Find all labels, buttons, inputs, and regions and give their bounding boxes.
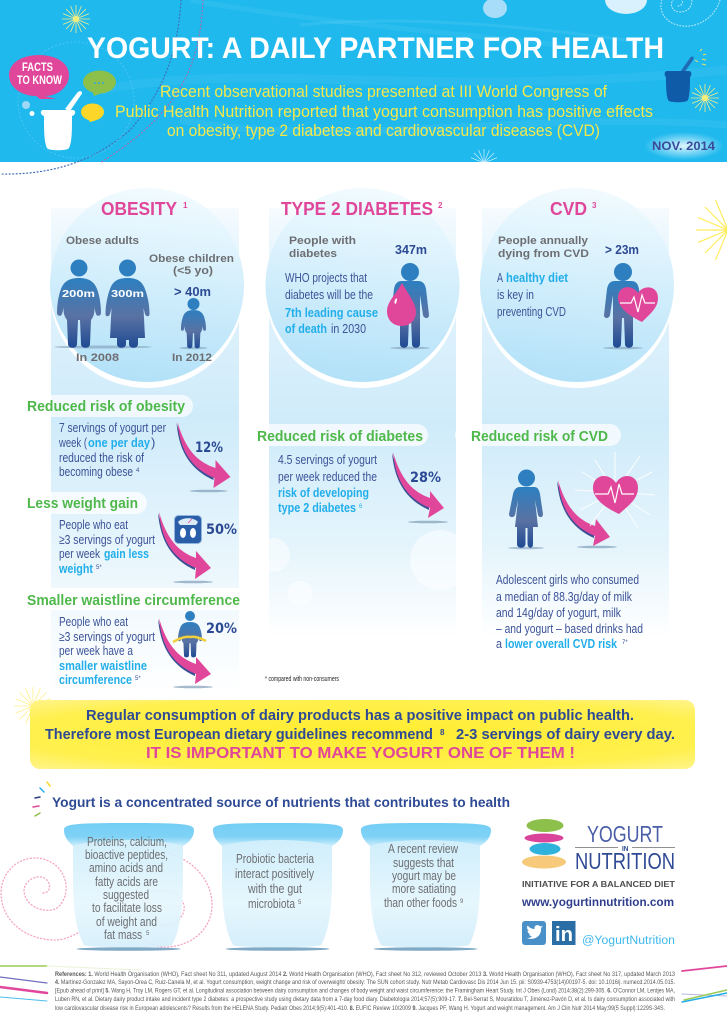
yogurt cup: satiating: suggests that (393, 855, 454, 870)
text: reduced risk of obesity: one per day (88, 435, 151, 450)
text: smaller waistline: smaller waistline (59, 658, 147, 673)
text: less weight gain: gain less (104, 546, 149, 561)
stat: 20 percent: 20% (206, 621, 237, 637)
icon: bathroom scale (174, 516, 202, 544)
date badge: NOV. 2014 (652, 139, 715, 153)
section: reduced risk of cvd: Reduced risk of CVD (471, 429, 608, 445)
text: reduced risk of obesity: becoming obese (59, 464, 133, 479)
obesity heading: 1 (183, 201, 188, 210)
text: reduced risk of diabetes (278, 452, 377, 515)
section: less weight gain: Less weight gain (27, 496, 138, 512)
people with diabetes label: diabetes (289, 248, 337, 260)
yogurt cup: loss of weight: 5 (146, 931, 150, 937)
references: low cardiovascular disease risk in European adolescents? Results from the HELENA Study. Pediatr Obes 2014;9(5):401-410. 8. EUFIC Review 10/2009 9. Jacques PF, Wang H. Yogurt and weight management. Am J Clin Nutr 2014 May;99(5 Suppl):1229S-34S. (55, 1005, 665, 1012)
in 2012 label: In 2012 (172, 352, 212, 364)
callout: dairy recommendation: 2-3 servings of dairy every day. (456, 727, 675, 743)
yogurt cup: satiating: 9 (460, 899, 464, 905)
icon: obese woman 300m: 300m (111, 288, 144, 300)
sparkle: header right (691, 84, 719, 112)
title: YOGURT: A DAILY PARTNER FOR HEALTH (87, 32, 664, 65)
text: reduced risk of diabetes: per week reduced the (278, 469, 377, 484)
header banner (0, 0, 727, 162)
text: healthy diet: is key in (497, 287, 534, 302)
icon: adolescent girl (508, 470, 544, 549)
text: adolescent girls: Adolescent girls who consumed (496, 572, 639, 587)
confetti (33, 782, 50, 816)
icon: obese man 200m: 200m (62, 288, 95, 300)
obesity background (50, 188, 244, 695)
sparkle: top left (62, 5, 90, 33)
yogurt cup: probiotic bacteria: with the gut (247, 881, 302, 896)
cvd heading: CVD (550, 199, 587, 219)
text: WHO projection: 7th leading cause (285, 305, 378, 320)
obesity heading: OBESITY (101, 199, 177, 219)
dotted pink spirals (1, 852, 212, 947)
icon: linkedin (552, 921, 576, 946)
cvd background (480, 188, 674, 638)
text: reduced risk of diabetes: risk of developing (278, 485, 369, 500)
yogurt cup: probiotic bacteria: Probiotic bacteria (236, 851, 315, 866)
callout: dairy recommendation: 8 (440, 728, 445, 737)
text: WHO projection: of death (285, 321, 327, 336)
diabetes background (266, 188, 460, 610)
subtitle: on obesity, type 2 diabetes and cardiovascular diseases (CVD) (167, 122, 600, 140)
text: WHO projection: in 2030 (331, 321, 366, 336)
yogurt cup: satiating: more satiating (392, 881, 456, 896)
text: adolescent girls: – and yogurt – based drinks had (496, 621, 643, 636)
decorative top circles (483, 0, 720, 26)
section: reduced risk of diabetes (240, 424, 428, 446)
icon: blue yogurt cup (665, 49, 706, 102)
heading: nutrients: Yogurt is a concentrated source of nutrients that contributes to health (52, 794, 510, 810)
yogurt cup: loss of weight: bioactive peptides, (85, 847, 168, 862)
yogurt cup: loss of weight: of weight and (96, 914, 157, 929)
tagline: INITIATIVE FOR A BALANCED DIET (522, 879, 676, 889)
icon: twitter (522, 921, 546, 945)
text: less weight gain (58, 517, 155, 576)
wordmark (575, 821, 675, 874)
text: reduced risk of diabetes: type 2 diabetes (278, 500, 356, 515)
text: reduced risk of obesity: week ( (58, 435, 87, 450)
text: less weight gain: People who eat (59, 517, 128, 532)
arrow: diabetes risk down (392, 452, 448, 523)
text: smaller waistline: circumference (59, 672, 132, 687)
social handle: @YogurtNutrition (582, 935, 675, 947)
people with diabetes label: People with (289, 235, 356, 247)
yogurt cup: loss of weight: fatty acids are (95, 874, 158, 889)
panel: cvd (455, 188, 674, 651)
text: reduced risk of diabetes: 4.5 servings of yogurt (278, 452, 377, 467)
cvd heading: 3 (592, 201, 597, 210)
text: healthy diet: healthy diet (506, 270, 569, 285)
text: reduced risk of obesity: 4 (136, 468, 140, 474)
text: smaller waistline: 5* (135, 676, 141, 682)
facts to know bubble: FACTS (22, 60, 53, 74)
text: adolescent girls: 7* (622, 640, 628, 646)
callout: dairy recommendation (30, 700, 695, 769)
people dying label: dying from CVD (498, 248, 589, 260)
347m value: 347m (395, 242, 427, 257)
obese children label (149, 253, 234, 277)
icon: linkedin: in (555, 924, 573, 946)
icon: waist measure figure (173, 611, 206, 657)
references: Luben RN, et al. Dietary dairy product intake and incident type 2 diabetes: a prospective study using dietary data from a 7-day food diary. Diabetologia 2014;57(5):909-17. 7. Bel-Serrat S, Mouratidou T, Jiménez-Pavón D, et al. Is dairy consumption associated with (55, 996, 675, 1003)
section: less weight gain (20, 492, 147, 514)
stat: 50 percent: 50% (206, 522, 237, 538)
text: reduced risk of obesity: 7 servings of yogurt per (59, 420, 167, 435)
yogurt cup: probiotic bacteria: microbiota (248, 896, 296, 911)
text: adolescent girls: lower overall CVD risk (505, 636, 618, 651)
yogurt cup: satiating: A recent review (388, 841, 458, 856)
logo: yogurt in nutrition (521, 819, 676, 947)
section: reduced risk of obesity (20, 395, 193, 417)
yogurt cup: loss of weight (64, 823, 194, 951)
wordmark: IN (622, 846, 628, 853)
yogurt cup: probiotic bacteria: interact positively (235, 866, 314, 881)
more than 40m value: > 40m (174, 284, 211, 299)
facts to know bubble (9, 55, 69, 99)
yogurt cup: probiotic bacteria: 5 (298, 900, 302, 906)
section: reduced risk of obesity: Reduced risk of obesity (27, 399, 185, 415)
icon: obese child (180, 298, 208, 349)
panel: type 2 diabetes (258, 188, 460, 610)
yogurt cup: loss of weight: fat mass (104, 927, 142, 942)
dotted trails (0, 0, 203, 174)
arrow: obesity risk down (176, 422, 230, 492)
callout: dairy recommendation: Therefore most European dietary guidelines recommend (45, 727, 433, 743)
stat: 28 percent: 28% (410, 470, 441, 486)
icon: obese woman 300m (106, 260, 150, 348)
section: reduced risk of diabetes: Reduced risk of diabetes (257, 429, 423, 445)
more than 23m value: > 23m (605, 242, 639, 257)
references: [Epub ahead of print] 5. Wang H, Troy LM, Rogers GT, et al. Longitudinal association between dairy consumption and changes of body weight and waist circumference: the Framingham Heart Study. Int J Obes (Lond) 2014;38(2):299-305. 6. O'Connor LM, Lentjes MA, (55, 988, 675, 994)
icon: glowing heart (575, 452, 655, 528)
references (55, 971, 675, 1012)
people with diabetes label (289, 235, 356, 260)
yogurt cup: loss of weight: to facilitate loss (92, 900, 162, 915)
yogurt cup: loss of weight: amino acids and (89, 860, 163, 875)
icon: figure with heart (603, 263, 658, 349)
diabetes heading: 2 (438, 201, 443, 210)
facts to know bubble: TO KNOW (17, 73, 63, 87)
subtitle (115, 83, 653, 140)
text: healthy diet: A (497, 270, 503, 285)
text: less weight gain: per week (59, 546, 100, 561)
people dying label (498, 235, 589, 260)
arrow: weight gain down (158, 512, 213, 583)
subtitle: Public Health Nutrition reported that yogurt consumption has positive effects (115, 103, 653, 121)
section: smaller waistline circumference: Smaller waistline circumference (27, 593, 240, 609)
yogurt cup: satiating (361, 823, 491, 951)
yogurt cup: loss of weight: suggested (103, 887, 149, 902)
yogurt cup: probiotic bacteria (213, 823, 343, 951)
footnote: * compared with non-consumers (265, 674, 339, 683)
icon: white yogurt cup (22, 91, 82, 150)
yogurt cup: satiating: than other foods (384, 895, 457, 910)
text: reduced risk of obesity: ) (151, 435, 155, 450)
text: adolescent girls (496, 572, 643, 651)
website: www.yogurtinnutrition.com (521, 897, 674, 909)
yogurt cup: loss of weight: Proteins, calcium, (87, 834, 167, 849)
callout: dairy recommendation: IT IS IMPORTANT TO MAKE YOGURT ONE OF THEM ! (146, 745, 575, 762)
arrow: waistline down (158, 618, 213, 688)
text: WHO projection: WHO projects that (285, 270, 367, 285)
text: smaller waistline: ≥3 servings of yogurt (59, 629, 155, 644)
text: less weight gain: 5* (96, 565, 102, 571)
obese children label: Obese children (149, 253, 234, 265)
obese children label: (<5 yo) (173, 265, 213, 277)
text: WHO projection: diabetes will be the (285, 287, 373, 302)
text: less weight gain: ≥3 servings of yogurt (59, 532, 155, 547)
text: reduced risk of diabetes: 6 (359, 504, 363, 510)
text: healthy diet: preventing CVD (497, 304, 566, 319)
subtitle: Recent observational studies presented at III World Congress of (160, 83, 607, 101)
text: smaller waistline: per week have a (59, 643, 134, 658)
text: adolescent girls: a (496, 636, 503, 651)
sparkle: lower left (14, 687, 52, 725)
icon: stacked ellipses (522, 819, 566, 868)
arrow: cvd risk down (557, 480, 617, 548)
section: reduced risk of cvd (455, 424, 621, 446)
date badge (644, 132, 724, 160)
text: adolescent girls: and 14g/day of yogurt, milk (496, 605, 621, 620)
text: smaller waistline: People who eat (59, 614, 128, 629)
icon: figure with blood drop (387, 263, 430, 349)
panel: obesity (20, 188, 244, 695)
text: WHO projection (285, 270, 378, 336)
text: smaller waistline (59, 614, 155, 687)
wordmark: YOGURT (587, 821, 663, 847)
text: adolescent girls: a median of 88.3g/day of milk (496, 589, 632, 604)
in 2008 label: In 2008 (76, 352, 119, 364)
sparkle: header bottom (470, 149, 498, 162)
wordmark: NUTRITION (575, 848, 675, 874)
icon: obese man 200m (54, 260, 152, 348)
stat: 12 percent: 12% (195, 440, 223, 456)
callout: dairy recommendation: Regular consumption of dairy products has a positive impact on public health. (86, 708, 634, 724)
obese adults label: Obese adults (66, 235, 139, 247)
references: References: 1. World Health Organisation (WHO), Fact sheet No 311, updated August 2014 2. World Health Organisation (WHO), Fact sheet No 312, reviewed October 2013 3. World Health Organisation (WHO), Fact sheet No 317, updated March 2013 (55, 971, 675, 978)
text: reduced risk of obesity (58, 420, 167, 479)
yogurt cup: satiating: yogurt may be (392, 868, 456, 883)
ribbons (0, 966, 727, 1002)
icon: speech bubbles (81, 70, 116, 122)
people dying label: People annually (498, 235, 589, 247)
diabetes heading: TYPE 2 DIABETES (281, 199, 433, 219)
sparkle: right edge (696, 198, 727, 262)
text: reduced risk of obesity: reduced the risk of (59, 450, 144, 465)
text: less weight gain: weight (58, 561, 94, 576)
text: healthy diet (497, 270, 569, 319)
